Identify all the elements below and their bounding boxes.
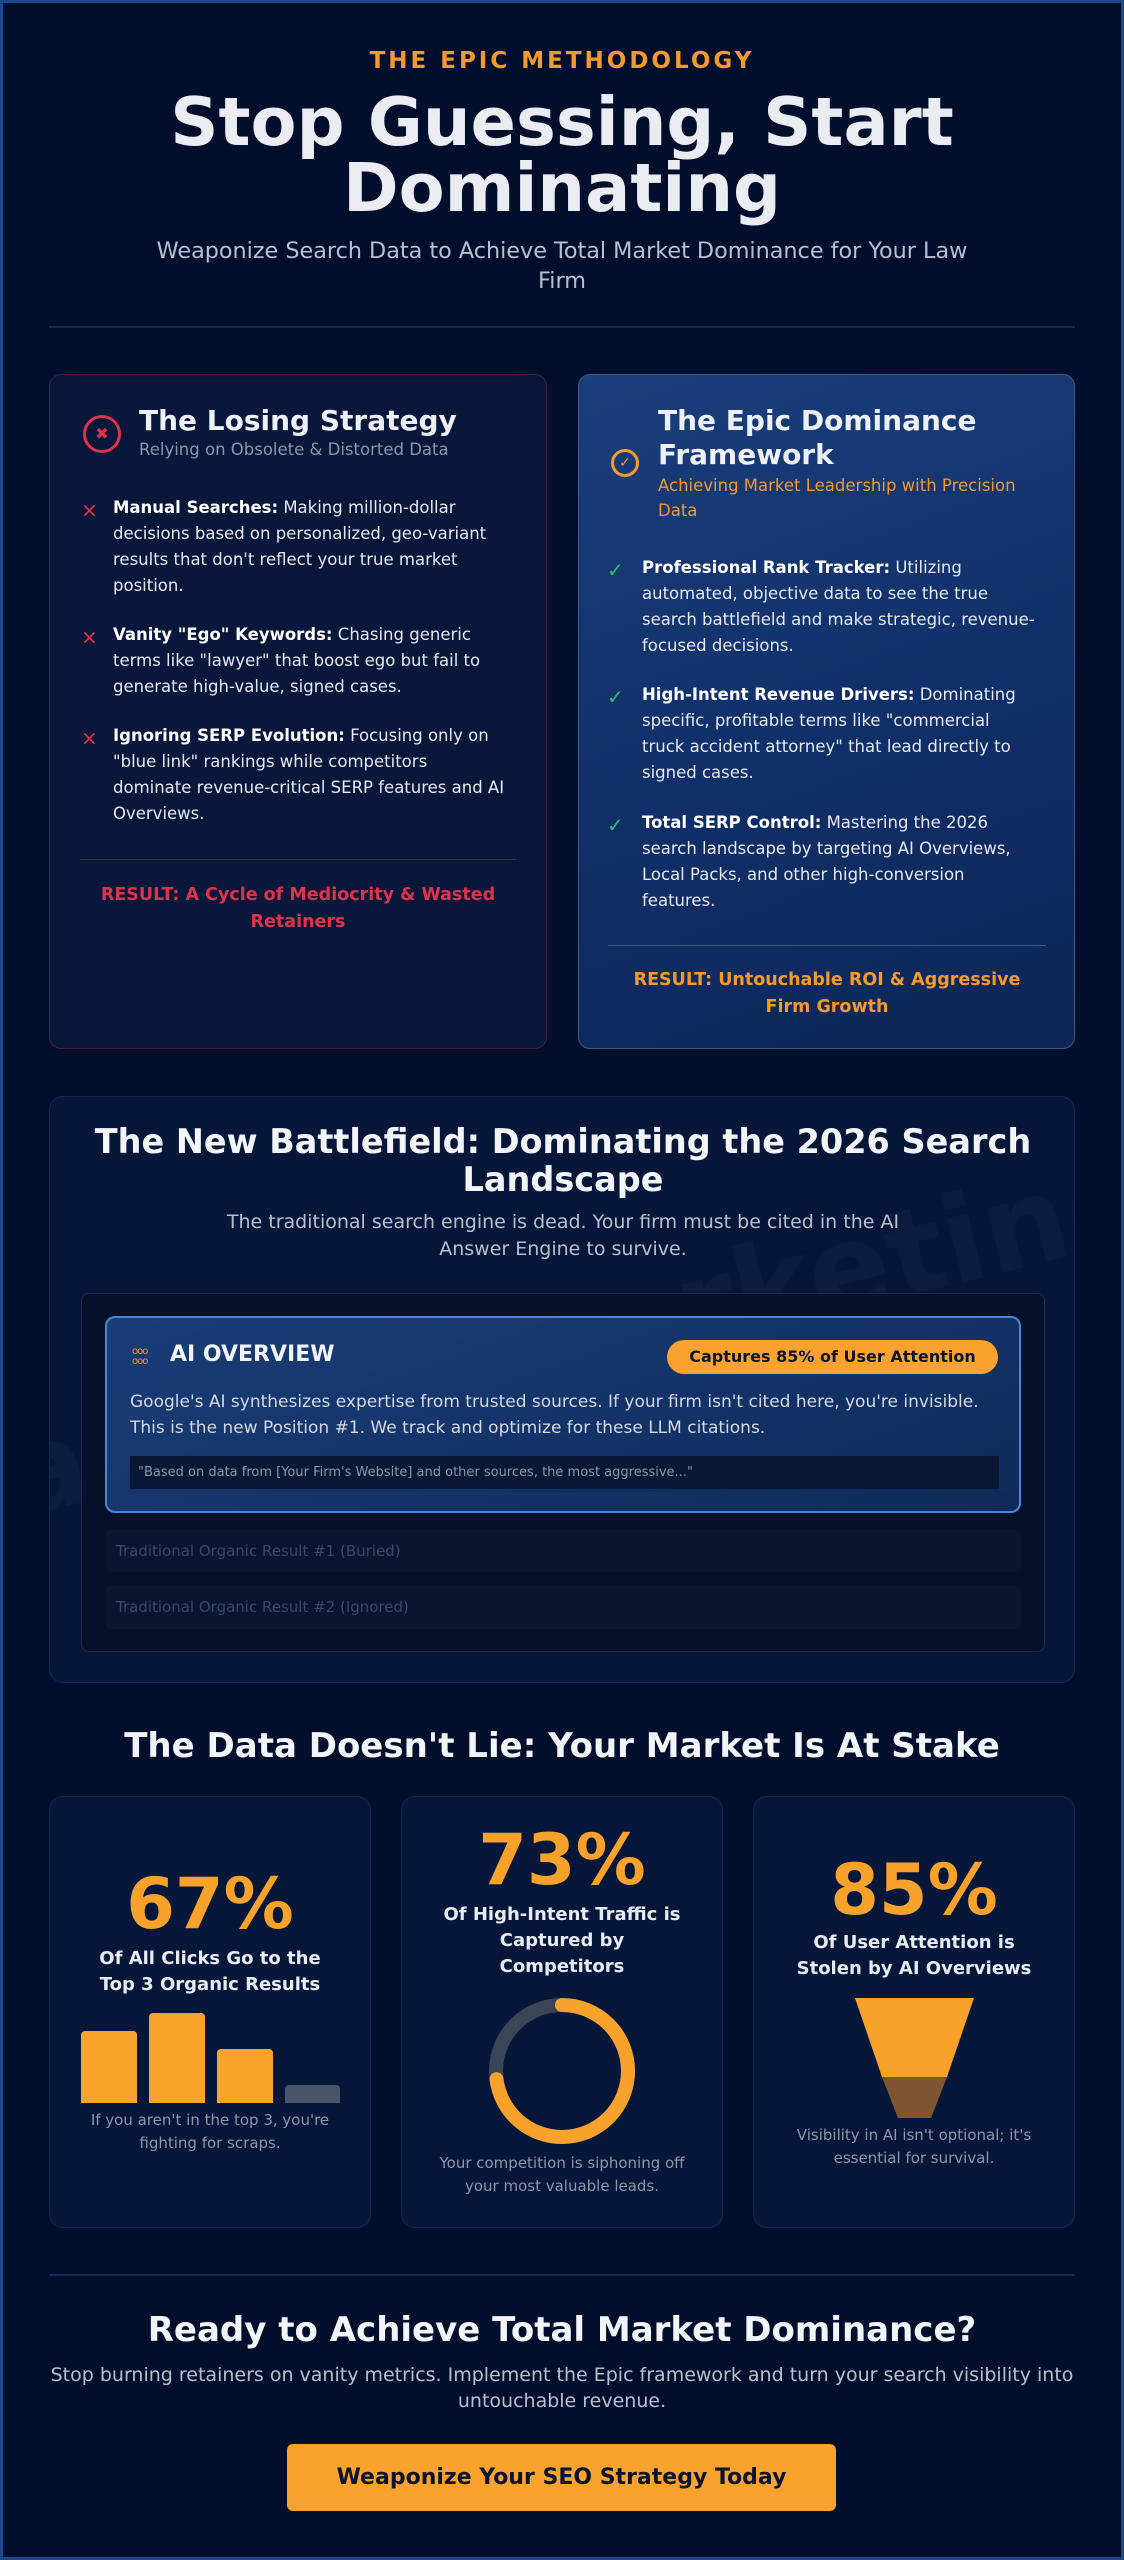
icon: ai nodes: ooo <box>132 1346 147 1357</box>
ai overview box <box>105 1316 1021 1513</box>
quote: "Based on data from [Your Firm's Website] and other sources, the most aggressive..." <box>138 1465 693 1480</box>
stat card: 73: 73% <box>478 1819 646 1901</box>
heading: The New Battlefield: Dominating the 2026 Search Landscape <box>95 1122 1031 1199</box>
stat card: 73: Captured by <box>500 1930 624 1951</box>
stat card: 85 <box>753 1796 1075 2228</box>
organic result 1 <box>105 1530 1021 1572</box>
ai label: AI OVERVIEW <box>170 1342 334 1367</box>
panel: epic framework: Total SERP Control: Mastering the 2026 search landscape by targeting AI Overviews, Local Packs, and other high-conversion features. <box>642 813 1011 910</box>
organic result 2 <box>105 1586 1021 1629</box>
sub text: The traditional search engine is dead. Your firm must be cited in the AI Answer Engine to survive. <box>227 1211 899 1260</box>
panel: epic framework: ✓ <box>607 558 624 582</box>
stat card: 67 <box>49 1796 371 2228</box>
funnel <box>855 1998 974 2118</box>
stat card: 67: If you aren't in the top 3, you're <box>91 2111 329 2129</box>
stat card: 73: Of High-Intent Traffic is <box>443 1904 681 1925</box>
stat card: 73: Your competition is siphoning off <box>439 2154 685 2172</box>
sub heading: Achieving Market Leadership with Precision Data <box>658 476 1016 520</box>
list item <box>81 625 480 696</box>
pill: Captures 85% of User Attention <box>689 1347 976 1366</box>
icon: check circle <box>611 449 639 477</box>
pill <box>667 1340 998 1374</box>
result: RESULT: Untouchable ROI & Aggressive Firm Growth <box>634 970 1020 1017</box>
stat card: 73 <box>401 1796 723 2228</box>
organic result 1: Traditional Organic Result #1 (Buried) <box>116 1542 401 1560</box>
subtitle: Weaponize Search Data to Achieve Total Market Dominance for Your Law Firm <box>157 238 967 294</box>
stat card: 73: your most valuable leads. <box>465 2177 659 2195</box>
stat card: 85: essential for survival. <box>834 2149 994 2167</box>
list item <box>607 813 1011 910</box>
stat card: 67: 67% <box>126 1863 294 1945</box>
list item <box>81 498 486 595</box>
eyebrow: THE EPIC METHODOLOGY <box>370 48 754 74</box>
panel: losing strategy: Manual Searches: Making million-dollar decisions based on personalized, geo-variant results that don't reflect your true market position. <box>113 498 486 595</box>
panel: losing strategy: Vanity "Ego" Keywords: Chasing generic terms like "lawyer" that boost ego but fail to generate high-value, signed cases. <box>113 625 480 696</box>
title: Stop Guessing, Start <box>170 83 954 161</box>
icon: ai nodes: ooo <box>132 1356 147 1367</box>
sub heading: Relying on Obsolete & Distorted Data <box>139 440 449 459</box>
result: RESULT: A Cycle of Mediocrity & Wasted Retainers <box>101 885 495 932</box>
heading: The Epic Dominance Framework <box>658 404 976 471</box>
list item <box>607 558 1035 655</box>
heading: data: The Data Doesn't Lie: Your Market Is At Stake <box>124 1726 1000 1766</box>
icon: check circle: ✓ <box>619 455 631 471</box>
cta text: Stop burning retainers on vanity metrics. Implement the Epic framework and turn your search visibility into untouchable revenue. <box>51 2364 1073 2412</box>
panel: losing strategy: × <box>81 498 98 522</box>
panel: losing strategy: × <box>81 625 98 649</box>
organic result 2: Traditional Organic Result #2 (Ignored) <box>116 1598 409 1616</box>
stat card: 85: Of User Attention is <box>813 1932 1015 1953</box>
serp mockup <box>81 1293 1045 1652</box>
stat card: 67: fighting for scraps. <box>139 2134 281 2152</box>
list item <box>607 685 1016 782</box>
stat card: 67: Top 3 Organic Results <box>100 1974 320 1995</box>
title <box>170 83 954 227</box>
heading: The Losing Strategy <box>139 404 457 437</box>
stat card: 85: Stolen by AI Overviews <box>797 1958 1031 1979</box>
quote <box>130 1456 999 1489</box>
bar chart <box>81 2013 340 2103</box>
cta button <box>287 2444 836 2511</box>
panel: losing strategy <box>49 374 547 1049</box>
body: Google's AI synthesizes expertise from trusted sources. If your firm isn't cited here, you're invisible. This is the new Position #1. We track and optimize for these LLM citations. <box>130 1392 979 1438</box>
panel: losing strategy: Ignoring SERP Evolution: Focusing only on "blue link" rankings while competitors <box>113 726 489 771</box>
title: Dominating <box>343 149 781 227</box>
list item <box>81 726 504 823</box>
stat card: 73: Competitors <box>500 1956 624 1977</box>
panel: epic framework: ✓ <box>607 813 624 837</box>
stat card: 85: Visibility in AI isn't optional; it's <box>797 2126 1031 2144</box>
icon: ai nodes <box>132 1346 148 1367</box>
panel: epic framework <box>578 374 1075 1049</box>
panel: epic framework: Professional Rank Tracker: Utilizing automated, objective data to see the true search battlefield and make strategic, revenue-focused decisions. <box>642 558 1035 655</box>
panel: losing strategy: dominate revenue-critical SERP features and AI Overviews. <box>113 778 504 823</box>
stat card: 67: Of All Clicks Go to the <box>99 1948 321 1969</box>
cta button: Weaponize Your SEO Strategy Today <box>337 2465 786 2490</box>
icon: x circle <box>83 415 121 453</box>
stat card: 85: 85% <box>830 1849 998 1931</box>
donut chart <box>489 1998 635 2144</box>
cta heading: Ready to Achieve Total Market Dominance? <box>148 2310 976 2350</box>
panel: epic framework: High-Intent Revenue Drivers: Dominating specific, profitable terms like "commercial truck accident attorney" that lead directly to signed cases. <box>642 685 1016 782</box>
panel: losing strategy: × <box>81 726 98 750</box>
icon: x circle: ✖ <box>95 424 109 443</box>
panel: epic framework: ✓ <box>607 685 624 709</box>
